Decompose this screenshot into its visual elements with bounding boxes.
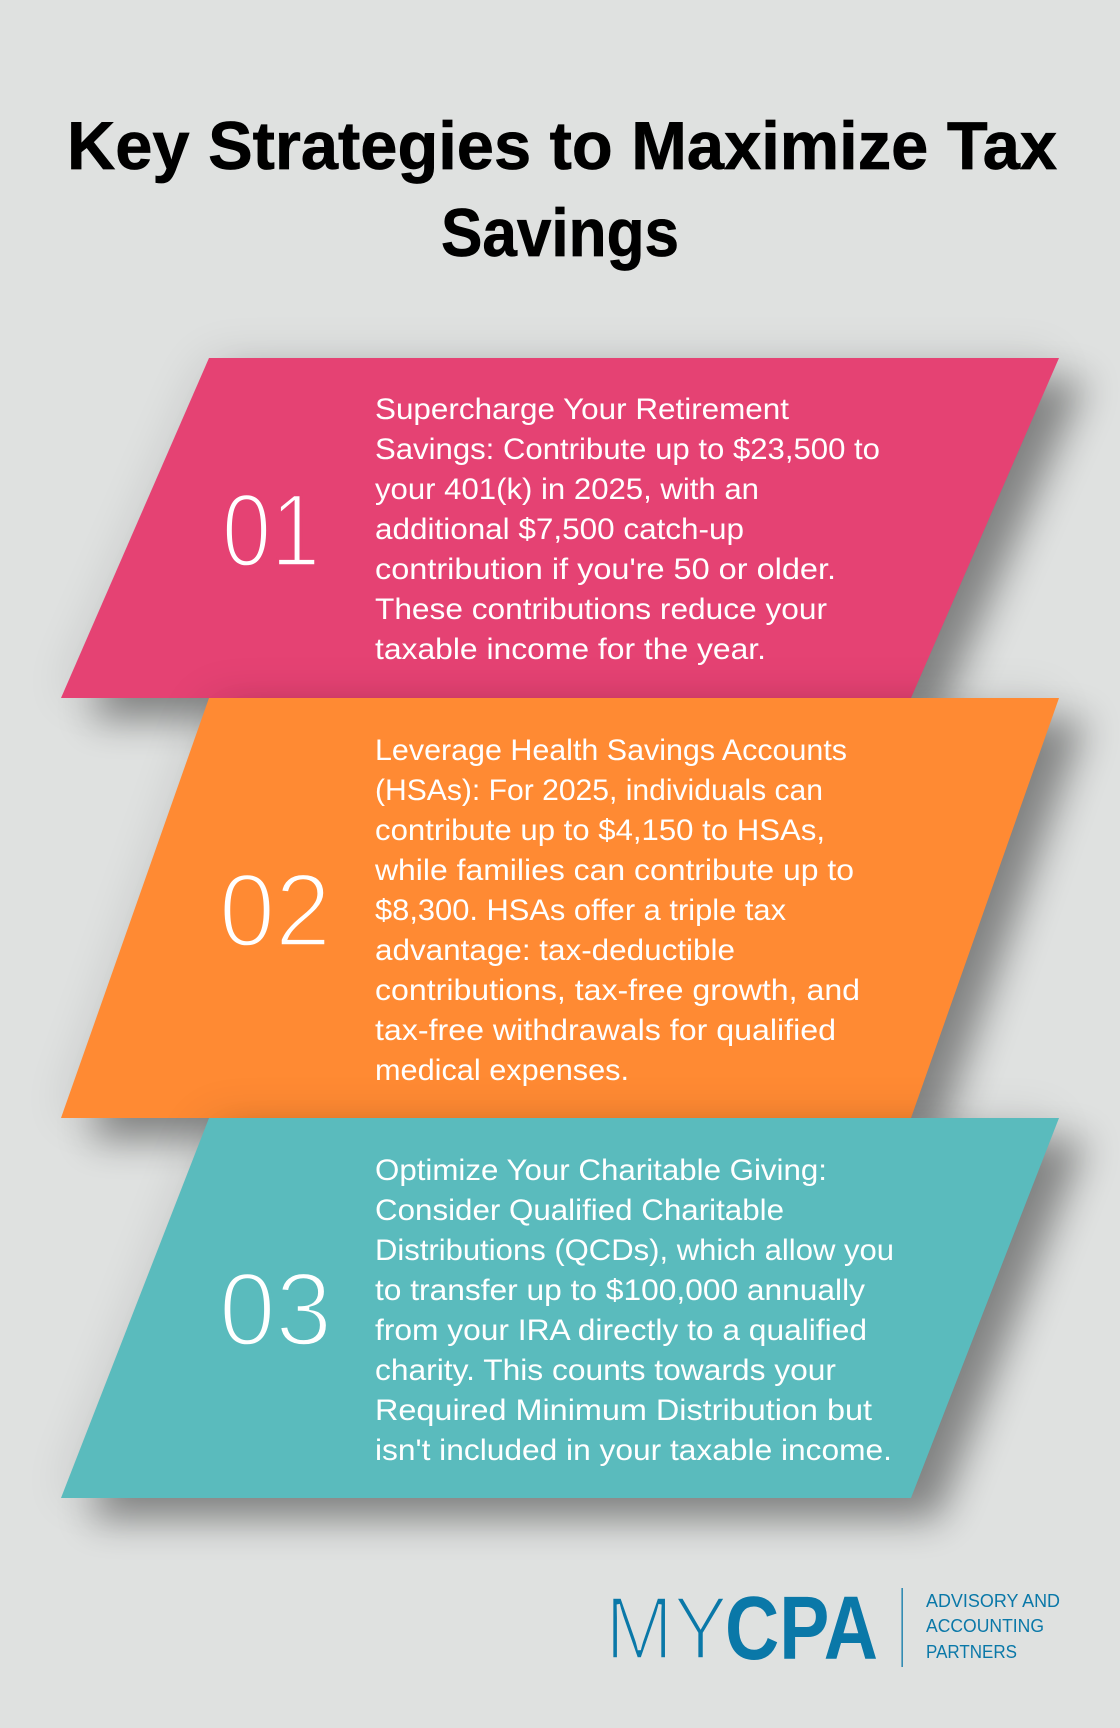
text: charitable giving: Consider Qualified Charitable bbox=[375, 1194, 784, 1227]
text: retirement savings: Savings: Contribute up to $23,500 to bbox=[375, 433, 880, 466]
logo: MYCPA: CPA bbox=[725, 1579, 878, 1679]
text: charitable giving: Optimize Your Charitable Giving: bbox=[375, 1154, 827, 1187]
teal parallelogram bbox=[61, 1118, 1059, 1498]
text: charitable giving bbox=[375, 1154, 894, 1467]
text: charitable giving: Required Minimum Distribution but bbox=[375, 1394, 873, 1427]
text: health savings accounts: advantage: tax-deductible bbox=[375, 934, 735, 967]
pink parallelogram bbox=[61, 358, 1059, 698]
text: retirement savings: These contributions reduce your bbox=[375, 593, 827, 626]
text: charitable giving: Distributions (QCDs), which allow you bbox=[375, 1234, 894, 1267]
text: charitable giving: isn't included in your taxable income. bbox=[375, 1434, 892, 1467]
title: Key Strategies to Maximize Tax bbox=[67, 108, 1057, 184]
text: health savings accounts: tax-free withdrawals for qualified bbox=[375, 1014, 836, 1047]
number 02: 02 bbox=[219, 853, 331, 969]
text: charitable giving: to transfer up to $100,000 annually bbox=[375, 1274, 865, 1307]
text: charitable giving: from your IRA directly to a qualified bbox=[375, 1314, 867, 1347]
text: health savings accounts: medical expenses. bbox=[375, 1054, 629, 1087]
number 01: 01 bbox=[222, 473, 320, 589]
panel: step 03 charitable giving bbox=[61, 1118, 1087, 1520]
number 03: 03 bbox=[219, 1252, 332, 1368]
text: retirement savings: contribution if you're 50 or older. bbox=[375, 553, 836, 586]
text: retirement savings: additional $7,500 catch-up bbox=[375, 513, 744, 546]
logo: MYCPA bbox=[605, 1579, 1060, 1679]
text: health savings accounts: (HSAs): For 2025, individuals can bbox=[375, 774, 823, 807]
text: health savings accounts: while families can contribute up to bbox=[374, 854, 854, 887]
text: health savings accounts: $8,300. HSAs offer a triple tax bbox=[375, 894, 786, 927]
title: Savings bbox=[441, 195, 679, 271]
logo tagline bbox=[926, 1591, 1060, 1662]
text: health savings accounts: Leverage Health Savings Accounts bbox=[375, 734, 847, 767]
logo tagline: ADVISORY AND bbox=[926, 1591, 1060, 1611]
logo: MYCPA: MY bbox=[605, 1579, 728, 1679]
logo tagline: PARTNERS bbox=[926, 1642, 1017, 1662]
text: health savings accounts: contributions, tax-free growth, and bbox=[375, 974, 860, 1007]
text: retirement savings: your 401(k) in 2025, with an bbox=[375, 473, 759, 506]
orange parallelogram bbox=[61, 698, 1059, 1118]
panel: step 02 health savings accounts bbox=[61, 698, 1087, 1140]
text: retirement savings: taxable income for the year. bbox=[375, 633, 766, 666]
text: health savings accounts: contribute up to $4,150 to HSAs, bbox=[375, 814, 825, 847]
panel: step 01 retirement savings bbox=[61, 358, 1087, 720]
title bbox=[67, 108, 1057, 271]
text: retirement savings: Supercharge Your Retirement bbox=[375, 393, 790, 426]
text: health savings accounts bbox=[374, 734, 860, 1087]
text: charitable giving: charity. This counts towards your bbox=[375, 1354, 836, 1387]
logo tagline: ACCOUNTING bbox=[926, 1616, 1044, 1636]
text: retirement savings bbox=[375, 393, 880, 666]
